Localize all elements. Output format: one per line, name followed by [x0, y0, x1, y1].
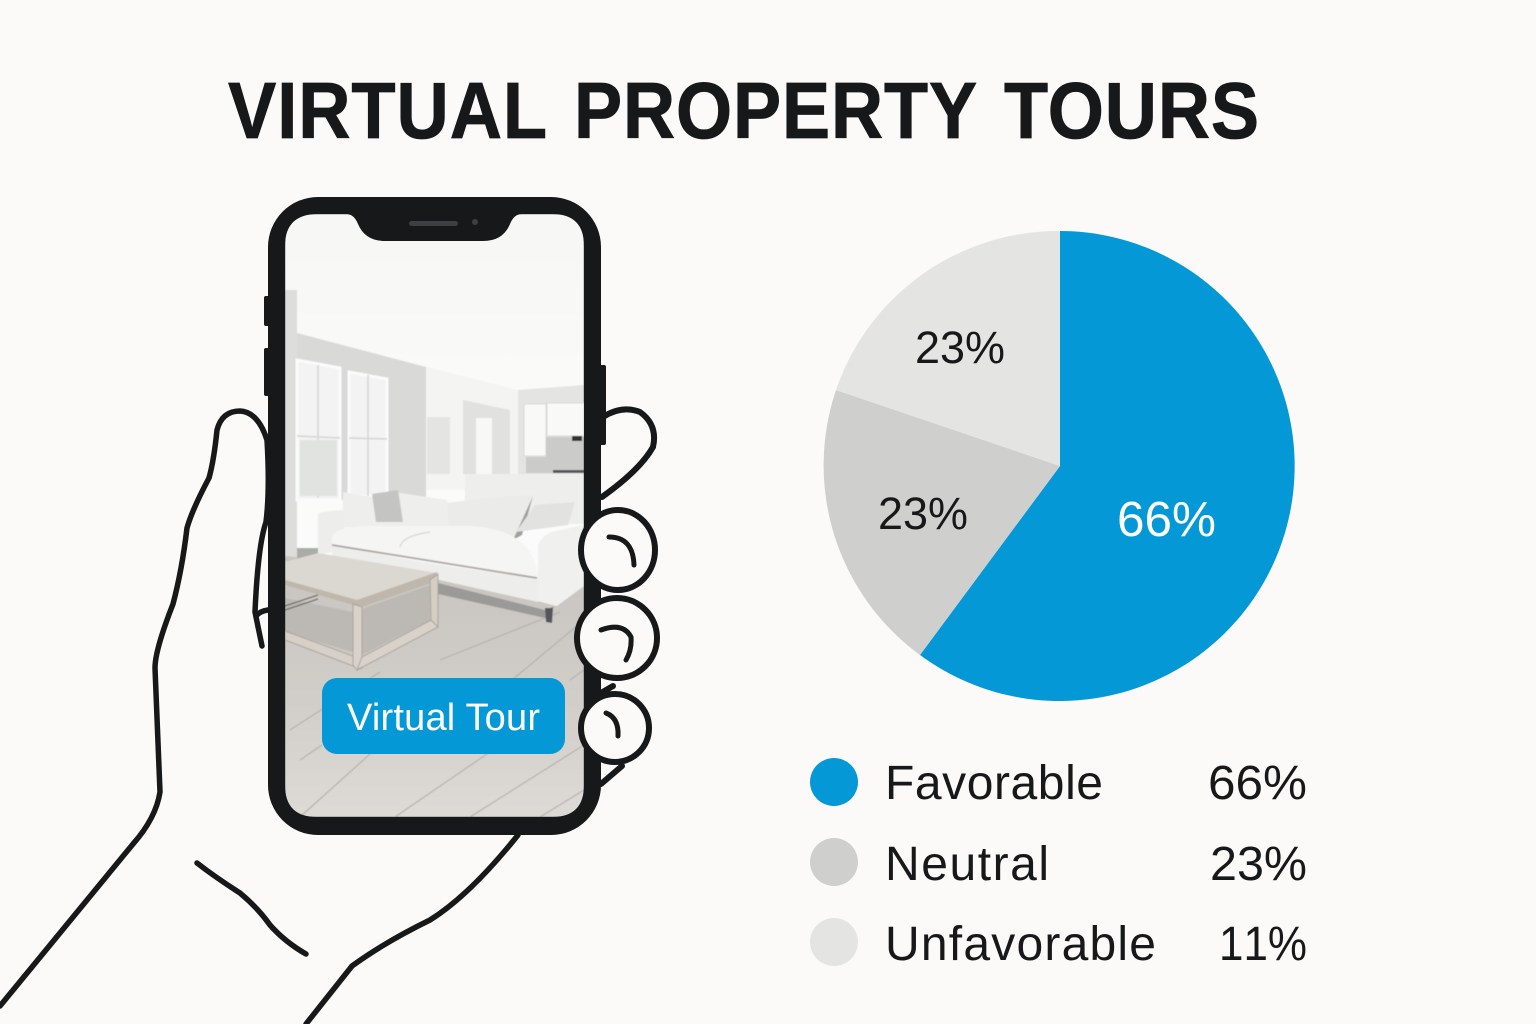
phone side buttons — [264, 296, 606, 445]
windows — [297, 360, 387, 500]
pie chart — [824, 231, 1295, 701]
sofa seat cushions — [454, 526, 516, 540]
legend: neutral: 23% — [1210, 838, 1307, 891]
shadow under sofa — [438, 583, 555, 618]
title — [228, 66, 1260, 155]
finger 3 — [581, 694, 649, 762]
title: PROPERTY — [574, 66, 978, 155]
notch speaker and camera — [409, 221, 458, 226]
walls — [297, 333, 426, 500]
pie labels — [878, 322, 1216, 547]
legend: favorable — [810, 757, 1307, 810]
fingers — [577, 409, 657, 784]
sofa right arm — [538, 525, 584, 607]
title: VIRTUAL — [228, 66, 548, 155]
button: Virtual Tour: Virtual Tour — [347, 697, 540, 739]
sofa base — [332, 540, 538, 602]
finger 1 — [581, 510, 655, 590]
table top — [285, 553, 437, 600]
finger 2 — [577, 598, 657, 678]
slice: unfavorable — [836, 231, 1060, 466]
shade under table — [285, 585, 430, 655]
slice: favorable — [920, 231, 1295, 701]
phone screen: living room photo — [285, 214, 584, 817]
pie labels: 23% — [915, 322, 1005, 373]
legend: unfavorable: 11% — [1219, 918, 1307, 971]
sofa — [318, 490, 584, 623]
slice: neutral — [824, 390, 1060, 655]
hand outline — [0, 411, 518, 1024]
legend: neutral — [810, 838, 1307, 891]
phone — [264, 197, 606, 835]
legend: favorable: Favorable — [885, 757, 1103, 810]
legend: favorable: 66% — [1208, 757, 1307, 810]
legend: neutral: Neutral — [885, 838, 1049, 891]
button: Virtual Tour — [322, 678, 565, 754]
legend: unfavorable: Unfavorable — [885, 918, 1156, 971]
floor — [285, 556, 584, 817]
title: TOURS — [1004, 66, 1260, 155]
pie labels: 23% — [878, 488, 968, 539]
coffee table — [285, 553, 438, 670]
legend — [810, 757, 1307, 971]
legend: unfavorable — [810, 918, 1307, 971]
doorway and kitchen — [463, 400, 510, 474]
pie labels: 66% — [1117, 493, 1216, 547]
illustration: hand holding phone — [0, 197, 657, 1024]
phone body — [268, 197, 601, 835]
